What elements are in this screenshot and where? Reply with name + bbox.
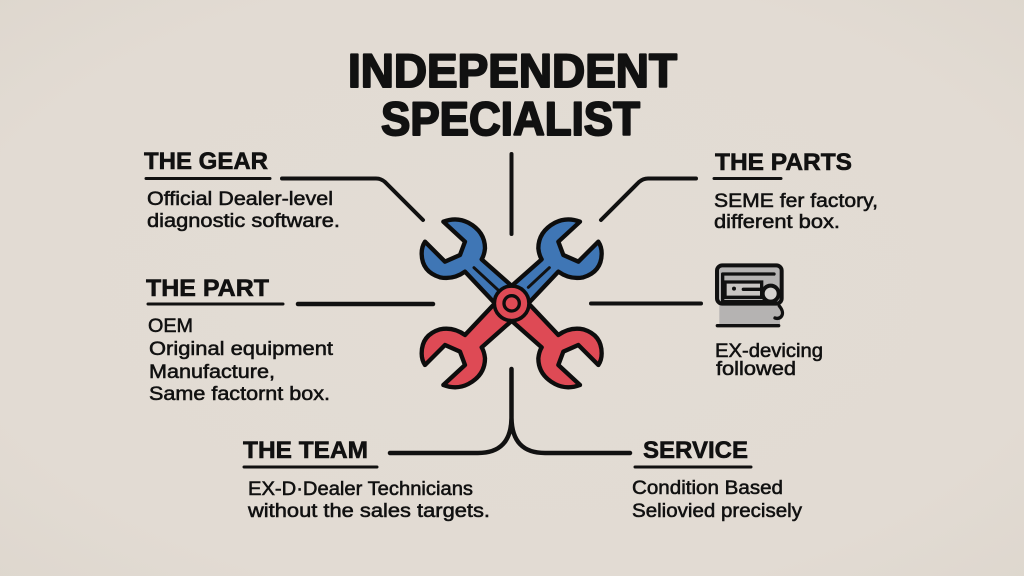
- panel: service: [632, 437, 802, 522]
- text: parts description: SEME fer factory,: [714, 190, 878, 212]
- text: team description: EX-D·Dealer Technicians: [248, 478, 473, 500]
- heading: service: SERVICE: [643, 437, 748, 464]
- heading: the parts: THE PARTS: [715, 149, 852, 176]
- title: SPECIALIST: [381, 92, 640, 145]
- panel: the team: [243, 437, 490, 522]
- heading: the team: THE TEAM: [243, 437, 368, 464]
- text: parts description: different box.: [714, 211, 840, 233]
- connector: part to wrench: [298, 302, 433, 306]
- text: device caption: [715, 340, 823, 380]
- connector: top vertical line: [510, 154, 514, 234]
- icon: red wrench right: [510, 305, 602, 387]
- icon: pivot bolt: [494, 286, 529, 321]
- panel: the gear: [144, 148, 340, 232]
- icon: red wrench left: [422, 305, 513, 387]
- heading: the gear: THE GEAR: [144, 148, 268, 175]
- text: part description: Original equipment: [149, 338, 334, 360]
- title: [348, 44, 677, 145]
- text: team description: without the sales targets.: [247, 500, 490, 522]
- text: part description: [148, 315, 334, 405]
- text: service description: Condition Based: [632, 477, 783, 499]
- connector: bottom fork to team and service: [390, 369, 630, 453]
- icon: crossed wrenches: [422, 219, 602, 387]
- text: team description: [247, 478, 490, 522]
- text: service description: Seliovied precisely: [632, 500, 802, 522]
- text: device caption: followed: [716, 358, 796, 380]
- icon: blue wrench left: [422, 219, 513, 302]
- text: gear description: Official Dealer-level: [147, 188, 333, 210]
- text: gear description: diagnostic software.: [147, 210, 340, 232]
- panel: the part: [146, 275, 334, 405]
- icon: blue wrench right: [510, 219, 602, 302]
- text: device caption: EX-devicing: [715, 340, 823, 362]
- connector: wrench to device: [591, 302, 701, 306]
- text: part description: Same factornt box.: [149, 383, 330, 405]
- connector: parts to wrench: [601, 178, 696, 220]
- title: INDEPENDENT: [348, 44, 677, 97]
- heading: the part: THE PART: [146, 275, 269, 302]
- icon: diagnostic device: [717, 265, 782, 326]
- text: part description: Manufacture,: [149, 361, 275, 383]
- panel: the parts: [714, 149, 878, 233]
- connector: gear to wrench: [282, 178, 423, 220]
- text: gear description: [147, 188, 340, 232]
- text: parts description: [714, 190, 878, 233]
- text: service description: [632, 477, 802, 522]
- text: part description: OEM: [148, 315, 193, 337]
